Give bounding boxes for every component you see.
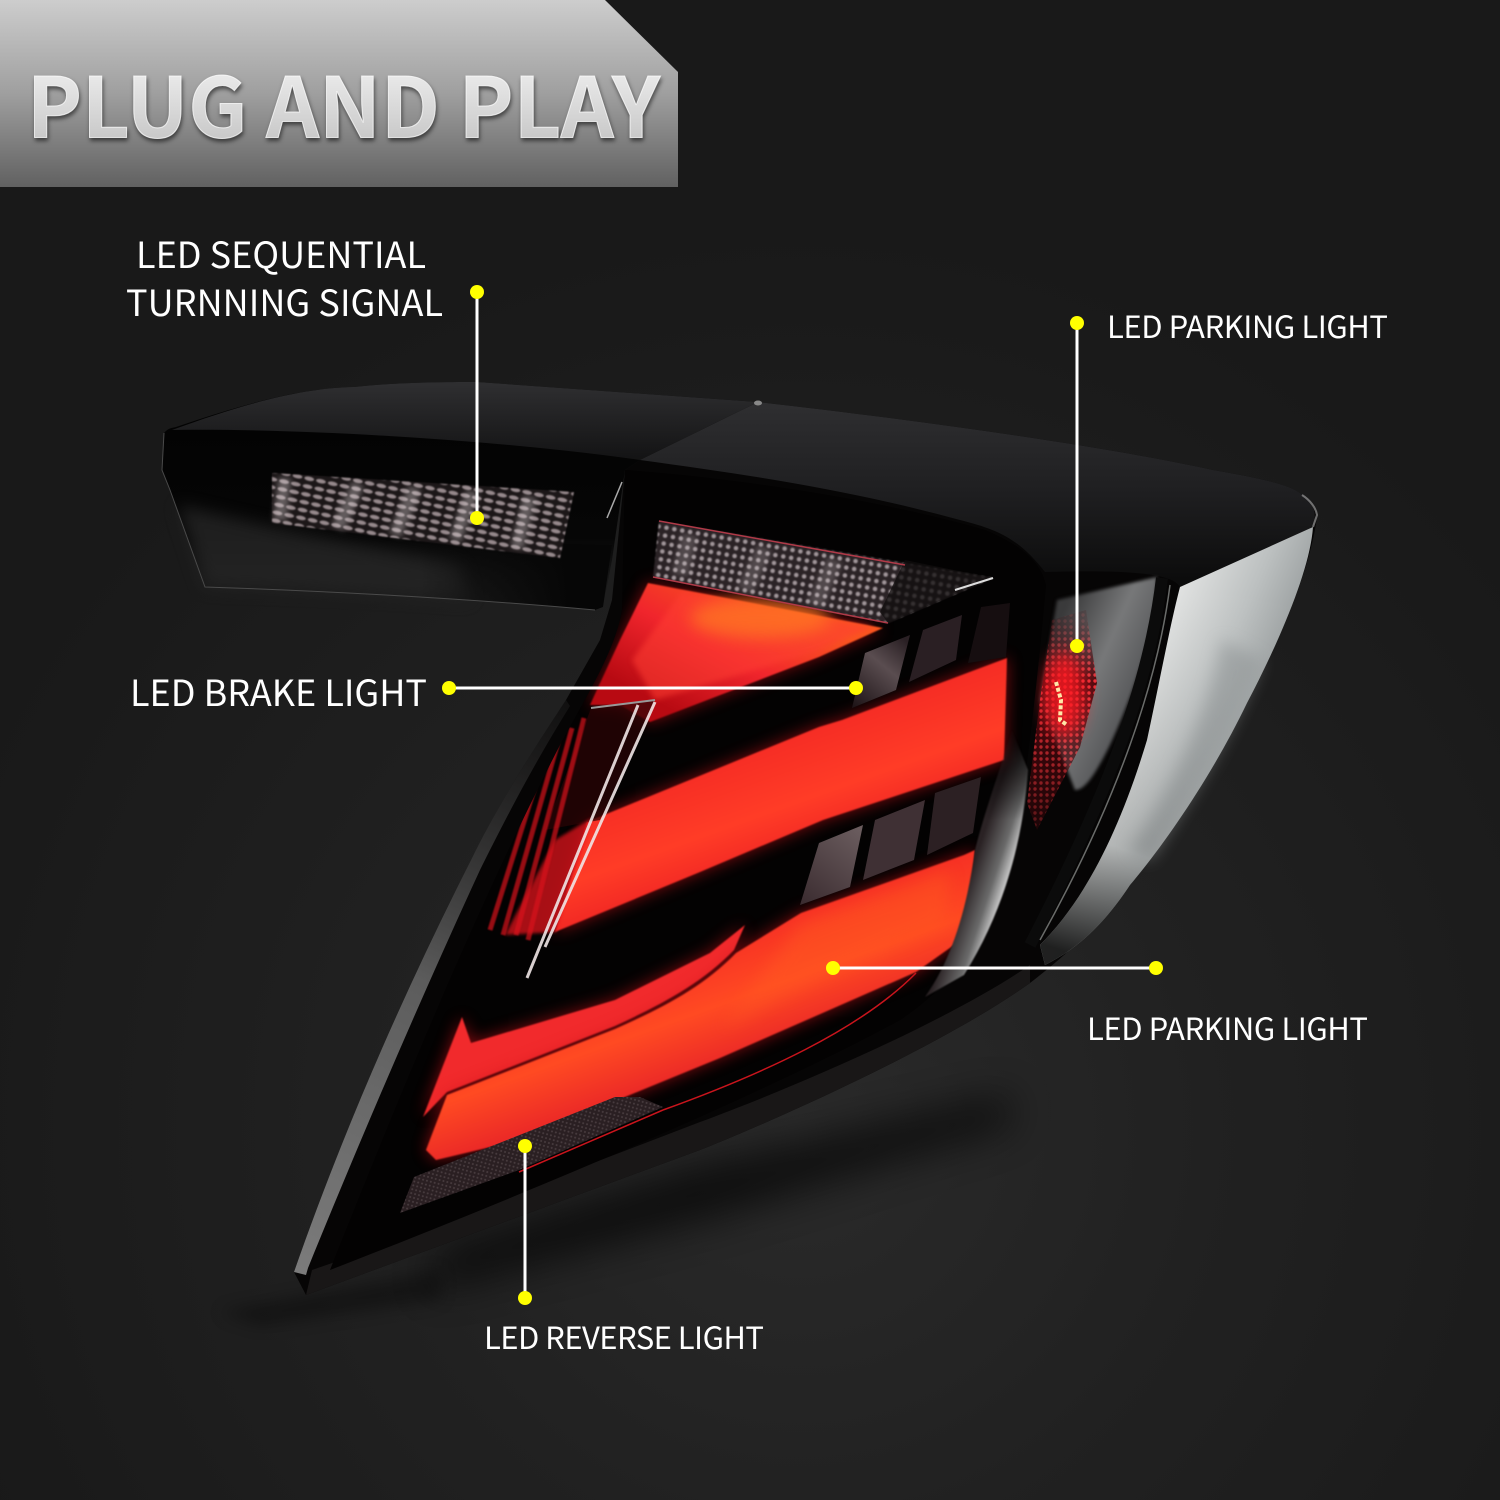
callout: LED reverse light (484, 1139, 764, 1358)
reverse lens (400, 1097, 663, 1213)
lower small lens modules (800, 777, 981, 905)
trunk lamp segment (162, 382, 758, 610)
callout: LED sequential turning signal: TURNNING SIGNAL (126, 275, 443, 327)
callout: LED brake light: LED BRAKE LIGHT (130, 665, 427, 717)
upper red light (590, 583, 883, 722)
title text: PLUG AND PLAY (27, 42, 661, 162)
side glass (1040, 495, 1317, 965)
bezel strip (925, 730, 1028, 997)
callout: LED parking light lower (826, 961, 1368, 1049)
lamp floor shadow (220, 1095, 1010, 1325)
banner plate (0, 0, 678, 187)
vertical light-guide strip (490, 700, 655, 978)
tail light product (162, 382, 1317, 1300)
side window grey lens (1040, 577, 1157, 790)
callout: LED reverse light: LED REVERSE LIGHT (484, 1313, 764, 1358)
main lamp body (294, 402, 1317, 1295)
title banner (0, 0, 678, 187)
lower red light bar (426, 850, 975, 1160)
side marker red lens (1027, 610, 1097, 830)
upper small lens modules (852, 603, 1010, 708)
top lens (653, 521, 993, 623)
outer grey edge (294, 700, 570, 1275)
middle red light bar (555, 658, 1007, 932)
callout: LED parking light lower: LED PARKING LIGHT (1087, 1004, 1368, 1049)
lamp interior (330, 520, 1039, 1270)
callout: LED parking light upper (1070, 302, 1388, 653)
callout: LED brake light (130, 665, 863, 717)
top surface (640, 402, 1315, 587)
callout: LED sequential turning signal: LED SEQUENTIAL (136, 227, 426, 279)
sequential signal lens (272, 473, 574, 558)
callout: LED parking light upper: LED PARKING LIGHT (1107, 302, 1388, 347)
callout: LED sequential turning signal (126, 227, 484, 525)
lower light guide (423, 925, 745, 1117)
